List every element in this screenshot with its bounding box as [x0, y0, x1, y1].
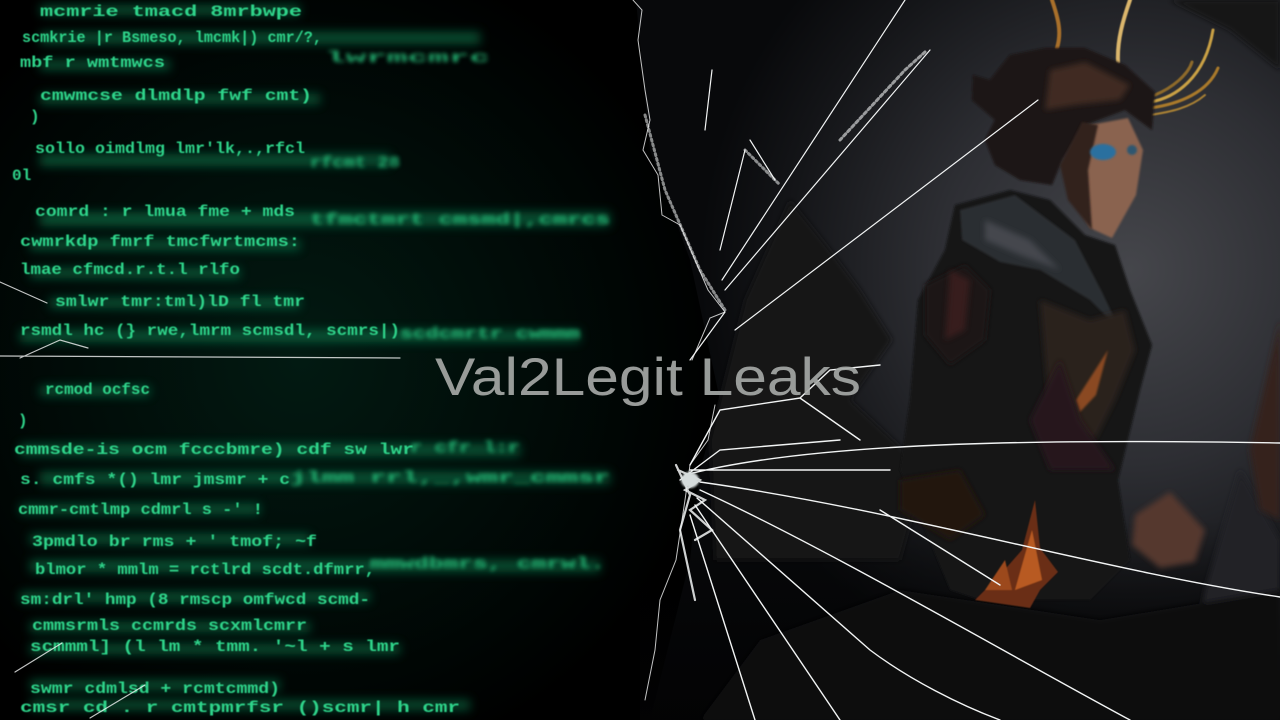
sharp code lines: cwmrkdp fmrf tmcfwrtmcms:	[20, 233, 300, 251]
sharp code lines: s. cmfs *() lmr jmsmr + c	[20, 471, 290, 489]
sharp code lines: scmkrie |r Bsmeso, lmcmk|) cmr/?,	[22, 29, 322, 47]
sharp code lines	[12, 3, 460, 717]
sharp code lines: smlwr tmr:tml)lD fl tmr	[55, 293, 305, 311]
crack: jagged shatter edge	[633, 0, 725, 700]
blue eye paint	[1090, 144, 1116, 160]
sharp code lines: cmwmcse dlmdlp fwf cmt)	[40, 87, 312, 105]
illustration: warrior woman	[900, 0, 1280, 608]
sharp code lines: sollo oimdlmg lmr'lk,.,rfcl	[35, 140, 305, 158]
panel: code screen background	[0, 0, 720, 720]
sharp code lines: cmsr cd . r cmtpmrfsr ()scmr| h cmr	[20, 699, 460, 717]
flames	[900, 470, 1058, 608]
sharp code lines: )	[30, 108, 40, 126]
sharp code lines: cmmsde-is ocm fcccbmre) cdf sw lwr	[14, 441, 414, 459]
faded code line ends: lwrmcmrc	[325, 49, 490, 67]
sharp code lines: rcmod ocfsc	[45, 381, 150, 399]
sharp code lines: cmmr-cmtlmp cdmrl s -' !	[18, 501, 263, 519]
sharp code lines: swmr cdmlsd + rcmtcmmd)	[30, 680, 280, 698]
glowing horns	[1052, 0, 1218, 115]
sharp code lines: scmmml] (l lm * tmm. '~l + s lmr	[30, 638, 400, 656]
hand	[1132, 492, 1205, 568]
faded code line ends: r cfr l:r	[410, 439, 520, 457]
sharp code lines: sm:drl' hmp (8 rmscp omfwcd scmd-	[20, 591, 370, 609]
armor	[925, 265, 990, 365]
crack: impact point shards	[676, 465, 712, 600]
sharp code lines: 0l	[12, 167, 31, 185]
faded code line ends: scdcmrtr cwmmm	[400, 325, 581, 343]
face	[1075, 118, 1143, 238]
sharp code lines: comrd : r lmua fme + mds	[35, 203, 295, 221]
sharp code lines: cmmsrmls ccmrds scxmlcmrr	[32, 617, 307, 635]
sharp code lines: blmor * mmlm = rctlrd scdt.dfmrr,	[35, 561, 375, 579]
right side figure	[1250, 320, 1280, 520]
crack: impact radial lines	[680, 365, 1280, 720]
faded code line ends: mmwdbmrs, cmrwl.	[370, 555, 605, 573]
sharp code lines: mbf r wmtmwcs	[20, 54, 165, 72]
sharp code lines: )	[18, 412, 28, 430]
panel: fantasy artwork background	[636, 0, 1280, 720]
mountains in artwork	[700, 200, 1280, 720]
faded code line ends: rfcmt 28	[310, 154, 400, 172]
sharp code lines: 3pmdlo br rms + ' tmof; ~f	[32, 533, 317, 551]
hair	[972, 48, 1155, 185]
sharp code lines: mcmrie tmacd 8mrbwpe	[40, 3, 302, 21]
sharp code lines: rsmdl hc (} rwe,lmrm scmsdl, scmrs|)	[20, 322, 400, 340]
crack: short left-side shards	[0, 282, 400, 718]
hood and torso	[900, 190, 1152, 600]
code text: blurred green lines	[12, 3, 610, 717]
sharp code lines: lmae cfmcd.r.t.l rlfo	[20, 261, 240, 279]
faded code line ends	[290, 49, 610, 573]
crack: upper radial lines	[690, 0, 1038, 360]
faded code line ends: jlmm rrl,_,wmr_cmmsr	[290, 469, 610, 487]
glow under code lines	[20, 5, 610, 710]
faded code line ends: tfmctmrt cmsmd|,cmrcs	[310, 211, 610, 229]
title: Val2Legit Leaks	[435, 348, 861, 407]
